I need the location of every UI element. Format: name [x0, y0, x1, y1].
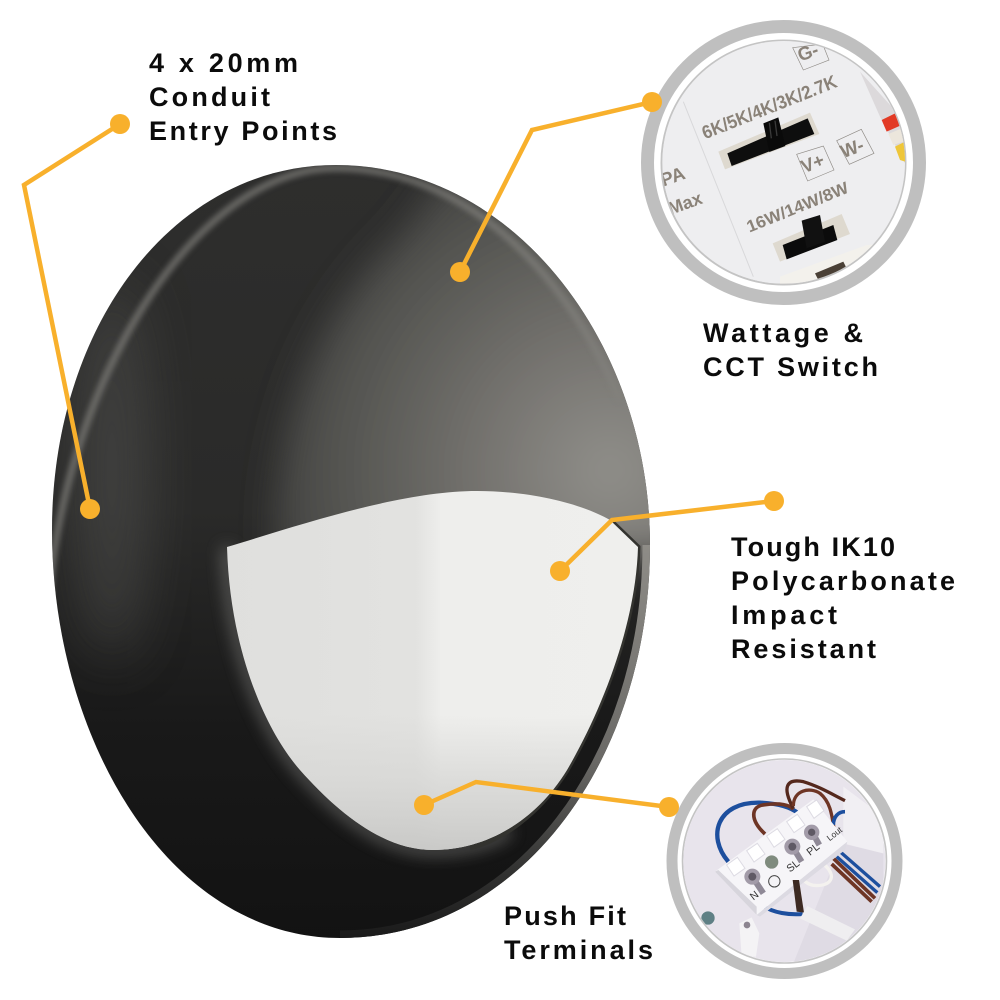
inset: push fit terminals — [672, 748, 897, 974]
terminals photo: SL — [784, 858, 802, 875]
switch photo: 6K/5K/4K/3K/2.7K — [699, 71, 840, 143]
label: push fit terminals — [504, 901, 653, 965]
lens — [220, 485, 645, 855]
callout line: terminals — [414, 782, 669, 815]
hood shading — [264, 180, 650, 583]
label: tough polycarbonate: Impact — [731, 600, 837, 630]
ring — [648, 26, 920, 298]
label: push fit terminals: Terminals — [504, 935, 653, 965]
light body — [52, 165, 650, 938]
switch photo: PA — [658, 162, 688, 190]
terminals photo — [682, 760, 888, 963]
terminals photo: PL — [804, 841, 822, 858]
terminals photo: N — [748, 889, 761, 903]
switch photo: 16W/14W/8W — [744, 178, 852, 236]
callout line: switch — [450, 102, 652, 282]
label: tough polycarbonate: Tough IK10 — [731, 532, 895, 562]
lens glow — [227, 547, 510, 850]
label: tough polycarbonate: Resistant — [731, 634, 876, 664]
label: wattage and CCT switch — [703, 318, 878, 382]
switch connector dot — [642, 92, 662, 112]
label: push fit terminals: Push Fit — [504, 901, 626, 931]
switch photo — [658, 39, 907, 287]
lens face — [220, 485, 645, 855]
switch photo: V+ — [798, 149, 827, 177]
lens dark edge — [470, 520, 638, 848]
label: tough polycarbonate: Polycarbonate — [731, 566, 955, 596]
ring — [672, 748, 897, 974]
switch photo: Max — [665, 188, 705, 219]
label: wattage and CCT switch: Wattage & — [703, 318, 863, 348]
inset: wattage and CCT switch — [648, 26, 920, 298]
label: conduit entry points — [149, 48, 337, 146]
switch photo: G- — [795, 39, 821, 65]
callout line: conduit entry — [24, 114, 130, 519]
label: conduit entry points: 4 x 20mm — [149, 48, 298, 78]
callout line: polycarbonate — [550, 491, 784, 581]
switch photo: W- — [837, 134, 867, 162]
label: conduit entry points: Entry Points — [149, 116, 337, 146]
terminals photo: Lout — [825, 824, 845, 843]
terminals connector dot — [659, 797, 679, 817]
soft outer edge sheen — [52, 165, 592, 589]
label: wattage and CCT switch: CCT Switch — [703, 352, 878, 382]
label: conduit entry points: Conduit — [149, 82, 270, 112]
label: tough polycarbonate — [731, 532, 955, 664]
left soft highlight — [76, 280, 148, 660]
wall light product — [52, 165, 650, 938]
right rim — [340, 545, 650, 938]
